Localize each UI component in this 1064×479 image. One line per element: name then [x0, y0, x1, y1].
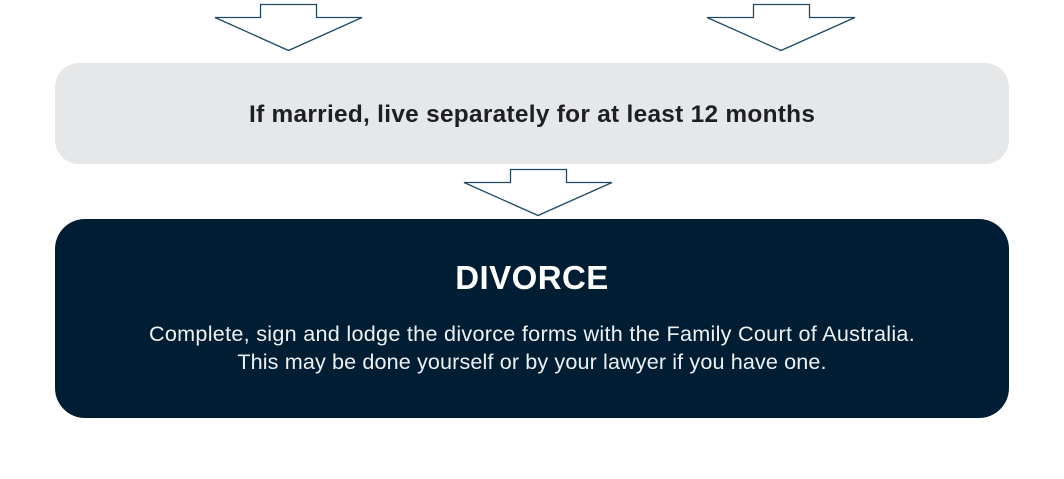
divorce heading: DIVORCE: [455, 259, 609, 296]
panel text: If married, live separately for at least 12 months: [249, 101, 815, 128]
panel: divorce: [55, 219, 1009, 418]
arrow: middle: [464, 168, 612, 216]
arrow: top right: [706, 4, 856, 52]
divorce description: Complete, sign and lodge the divorce forms with the Family Court of Australia.: [149, 321, 915, 346]
divorce description: [149, 321, 915, 374]
divorce description: This may be done yourself or by your lawyer if you have one.: [237, 349, 827, 374]
panel: live separately: [55, 63, 1009, 164]
arrow: top left: [214, 4, 362, 52]
